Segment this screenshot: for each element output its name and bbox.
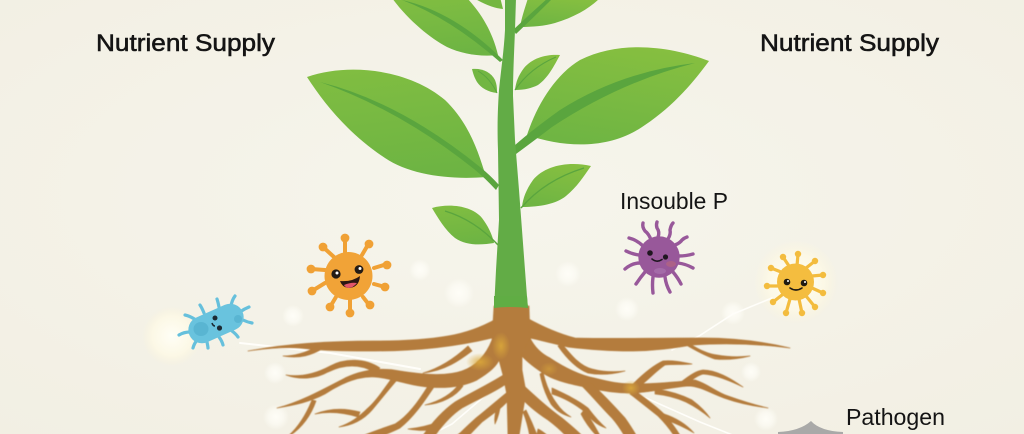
signal lines	[240, 298, 772, 434]
stem base	[494, 296, 528, 308]
heading: right nutrient supply: Nutrient Supply	[760, 30, 939, 57]
root branches left	[283, 346, 510, 434]
root branches right	[520, 344, 750, 434]
leaf: top centre	[472, 0, 503, 9]
heading: left nutrient supply: Nutrient Supply	[96, 30, 275, 57]
leaf: small left	[472, 69, 497, 93]
soft glow spots	[142, 240, 838, 431]
leaf: lower left	[432, 206, 499, 246]
gold nodes	[466, 332, 640, 396]
leaf: big right	[514, 47, 709, 154]
root: main right	[527, 318, 790, 351]
label: insoluble P: Insouble P	[620, 188, 728, 214]
microbe: orange	[307, 234, 391, 317]
root system	[248, 306, 790, 434]
root: left second	[277, 340, 500, 408]
leaf: big left	[307, 70, 499, 190]
trunk	[492, 306, 530, 434]
pathogen shape	[778, 421, 843, 434]
root: right second	[521, 338, 768, 408]
root: main left	[248, 319, 496, 351]
leaf: small right	[515, 55, 560, 90]
plant shoot	[307, 0, 709, 310]
stem	[494, 0, 528, 310]
leaf: upper right	[513, 0, 600, 34]
label: pathogen: Pathogen	[846, 404, 945, 430]
microbe: purple	[625, 222, 693, 293]
leaf: upper left	[392, 0, 503, 62]
leaf: middle right	[521, 164, 591, 208]
microbe: yellow	[764, 251, 826, 316]
microbe: blue bacterium	[179, 296, 252, 348]
